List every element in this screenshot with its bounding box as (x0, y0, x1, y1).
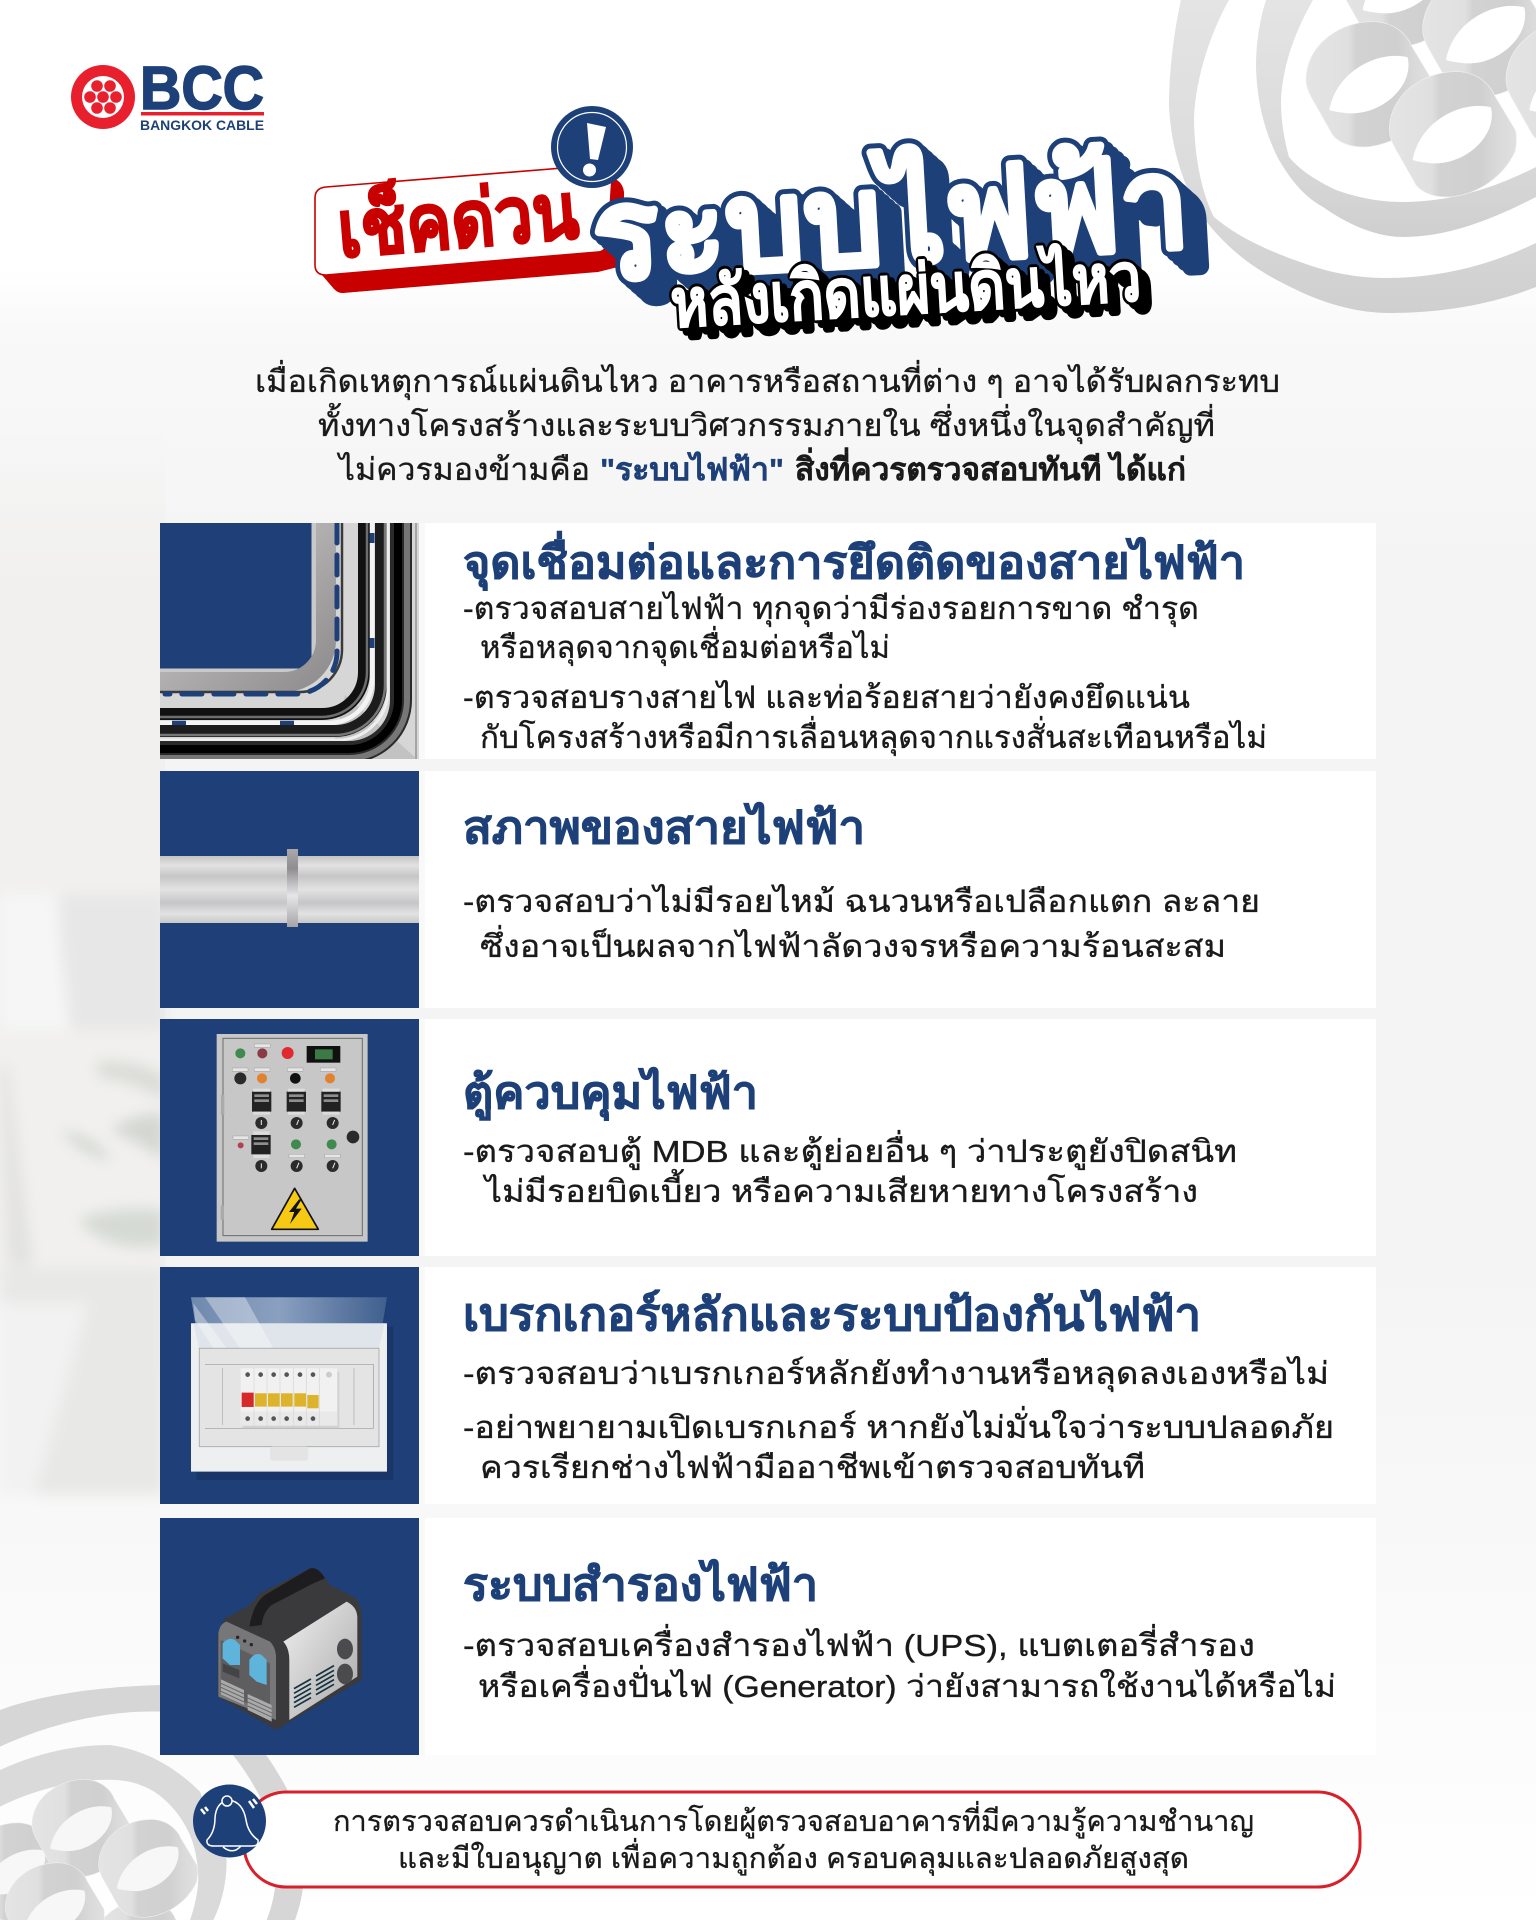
body text: หรือเครื่องปั่นไฟ (Generator) ว่ายังสามารถใช้งานได้หรือไม่ (478, 1665, 1336, 1704)
intro paragraph: สิ่งที่ควรตรวจสอบทันที ได้แก่ (795, 447, 1186, 487)
subtitle: หลังเกิดแผ่นดินไหว: หลังเกิดแผ่นดินไหว (679, 247, 1154, 351)
body text: -ตรวจสอบรางสายไฟ และท่อร้อยสายว่ายังคงยึดแน่น (463, 680, 1190, 715)
body text (463, 1624, 1336, 1704)
title: ระบบไฟฟ้า: ระบบไฟฟ้า (594, 135, 1198, 313)
panel: backup power (160, 1518, 1376, 1755)
panel: cable condition (160, 771, 1376, 1008)
title: ระบบไฟฟ้า: ระบบไฟฟ้า (588, 130, 1193, 308)
icon: cable with clamp (160, 771, 419, 1008)
body text: ไม่มีรอยบิดเบี้ยว หรือความเสียหายทางโครงสร้าง (482, 1169, 1198, 1209)
callout: inspector note (244, 1792, 1360, 1887)
icon: breaker panel (160, 1267, 419, 1504)
title: ระบบไฟฟ้า: ระบบไฟฟ้า (599, 139, 1203, 317)
title: ระบบไฟฟ้า: ระบบไฟฟ้า (604, 144, 1208, 322)
intro paragraph: เมื่อเกิดเหตุการณ์แผ่นดินไหว อาคารหรือสถานที่ต่าง ๆ อาจได้รับผลกระทบ (255, 360, 1280, 401)
title: ระบบไฟฟ้า: ระบบไฟฟ้า (588, 130, 1193, 308)
body text: -ตรวจสอบว่าเบรกเกอร์หลักยังทำงานหรือหลุดลงเองหรือไม่ (463, 1356, 1329, 1393)
body text (463, 884, 1260, 964)
subtitle: หลังเกิดแผ่นดินไหว: หลังเกิดแผ่นดินไหว (668, 238, 1143, 342)
body text: -ตรวจสอบเครื่องสำรองไฟฟ้า (UPS), แบตเตอรี่สำรอง (463, 1624, 1255, 1663)
panel: connections and fastening (160, 523, 1376, 759)
icon: cable conduit corner (160, 523, 419, 759)
title: ระบบไฟฟ้า: ระบบไฟฟ้า (610, 149, 1214, 327)
icon: control cabinet (160, 1019, 419, 1256)
icon: bell (193, 1784, 266, 1858)
heading: ระบบสำรองไฟฟ้า (463, 1558, 818, 1610)
heading: ตู้ควบคุมไฟฟ้า (463, 1066, 758, 1121)
intro paragraph: ไม่ควรมองข้ามคือ (336, 452, 590, 487)
icon: exclamation circle (551, 106, 633, 188)
body text: หรือหลุดจากจุดเชื่อมต่อหรือไม่ (480, 626, 890, 667)
body text: -ตรวจสอบสายไฟฟ้า ทุกจุดว่ามีร่องรอยการขาด ชำรุด (463, 591, 1199, 628)
icon: portable power unit (160, 1518, 419, 1755)
body text (463, 1130, 1237, 1209)
logo: BCC Bangkok Cable (71, 54, 264, 133)
panel: main breaker and protection (160, 1267, 1376, 1504)
subtitle: หลังเกิดแผ่นดินไหว: หลังเกิดแผ่นดินไหว (674, 243, 1148, 347)
intro paragraph: ทั้งทางโครงสร้างและระบบวิศวกรรมภายใน ซึ่งหนึ่งในจุดสำคัญที่ (318, 403, 1215, 445)
body text: -อย่าพยายามเปิดเบรกเกอร์ หากยังไม่มั่นใจว่าระบบปลอดภัย (463, 1406, 1334, 1445)
body text: -ตรวจสอบว่าไม่มีรอยไหม้ ฉนวนหรือเปลือกแตก ละลาย (463, 884, 1260, 919)
logo: BCC Bangkok Cable: BCC (140, 54, 264, 122)
callout: inspector note: และมีใบอนุญาต เพื่อความถูกต้อง ครอบคลุมและปลอดภัยสูงสุด (398, 1838, 1189, 1876)
panel: control cabinet (160, 1019, 1376, 1256)
body text: ควรเรียกช่างไฟฟ้ามืออาชีพเข้าตรวจสอบทันที (480, 1450, 1145, 1485)
body text (463, 591, 1267, 757)
callout: inspector note: การตรวจสอบควรดำเนินการโดยผู้ตรวจสอบอาคารที่มีความรู้ความชำนาญ (333, 1801, 1254, 1839)
subtitle: หลังเกิดแผ่นดินไหว: หลังเกิดแผ่นดินไหว (668, 238, 1143, 342)
heading: สภาพของสายไฟฟ้า (463, 801, 865, 853)
body text: ซึ่งอาจเป็นผลจากไฟฟ้าลัดวงจรหรือความร้อนสะสม (480, 925, 1226, 964)
body text: กับโครงสร้างหรือมีการเลื่อนหลุดจากแรงสั่นสะเทือนหรือไม่ (480, 716, 1267, 757)
body text: -ตรวจสอบตู้ MDB และตู้ย่อยอื่น ๆ ว่าประตูยังปิดสนิท (463, 1130, 1237, 1170)
decorative cable top right (1169, 0, 1536, 313)
heading: จุดเชื่อมต่อและการยึดติดของสายไฟฟ้า (463, 531, 1245, 591)
intro paragraph: "ระบบไฟฟ้า" (600, 451, 784, 487)
decorative cable bottom left (0, 1685, 304, 1920)
title badge: เช็คด่วน: เช็คด่วน (334, 164, 582, 274)
body text (463, 1356, 1334, 1485)
logo: BCC Bangkok Cable: BANGKOK CABLE (140, 118, 264, 133)
intro paragraph (255, 360, 1280, 487)
heading: เบรกเกอร์หลักและระบบป้องกันไฟฟ้า (463, 1288, 1201, 1340)
